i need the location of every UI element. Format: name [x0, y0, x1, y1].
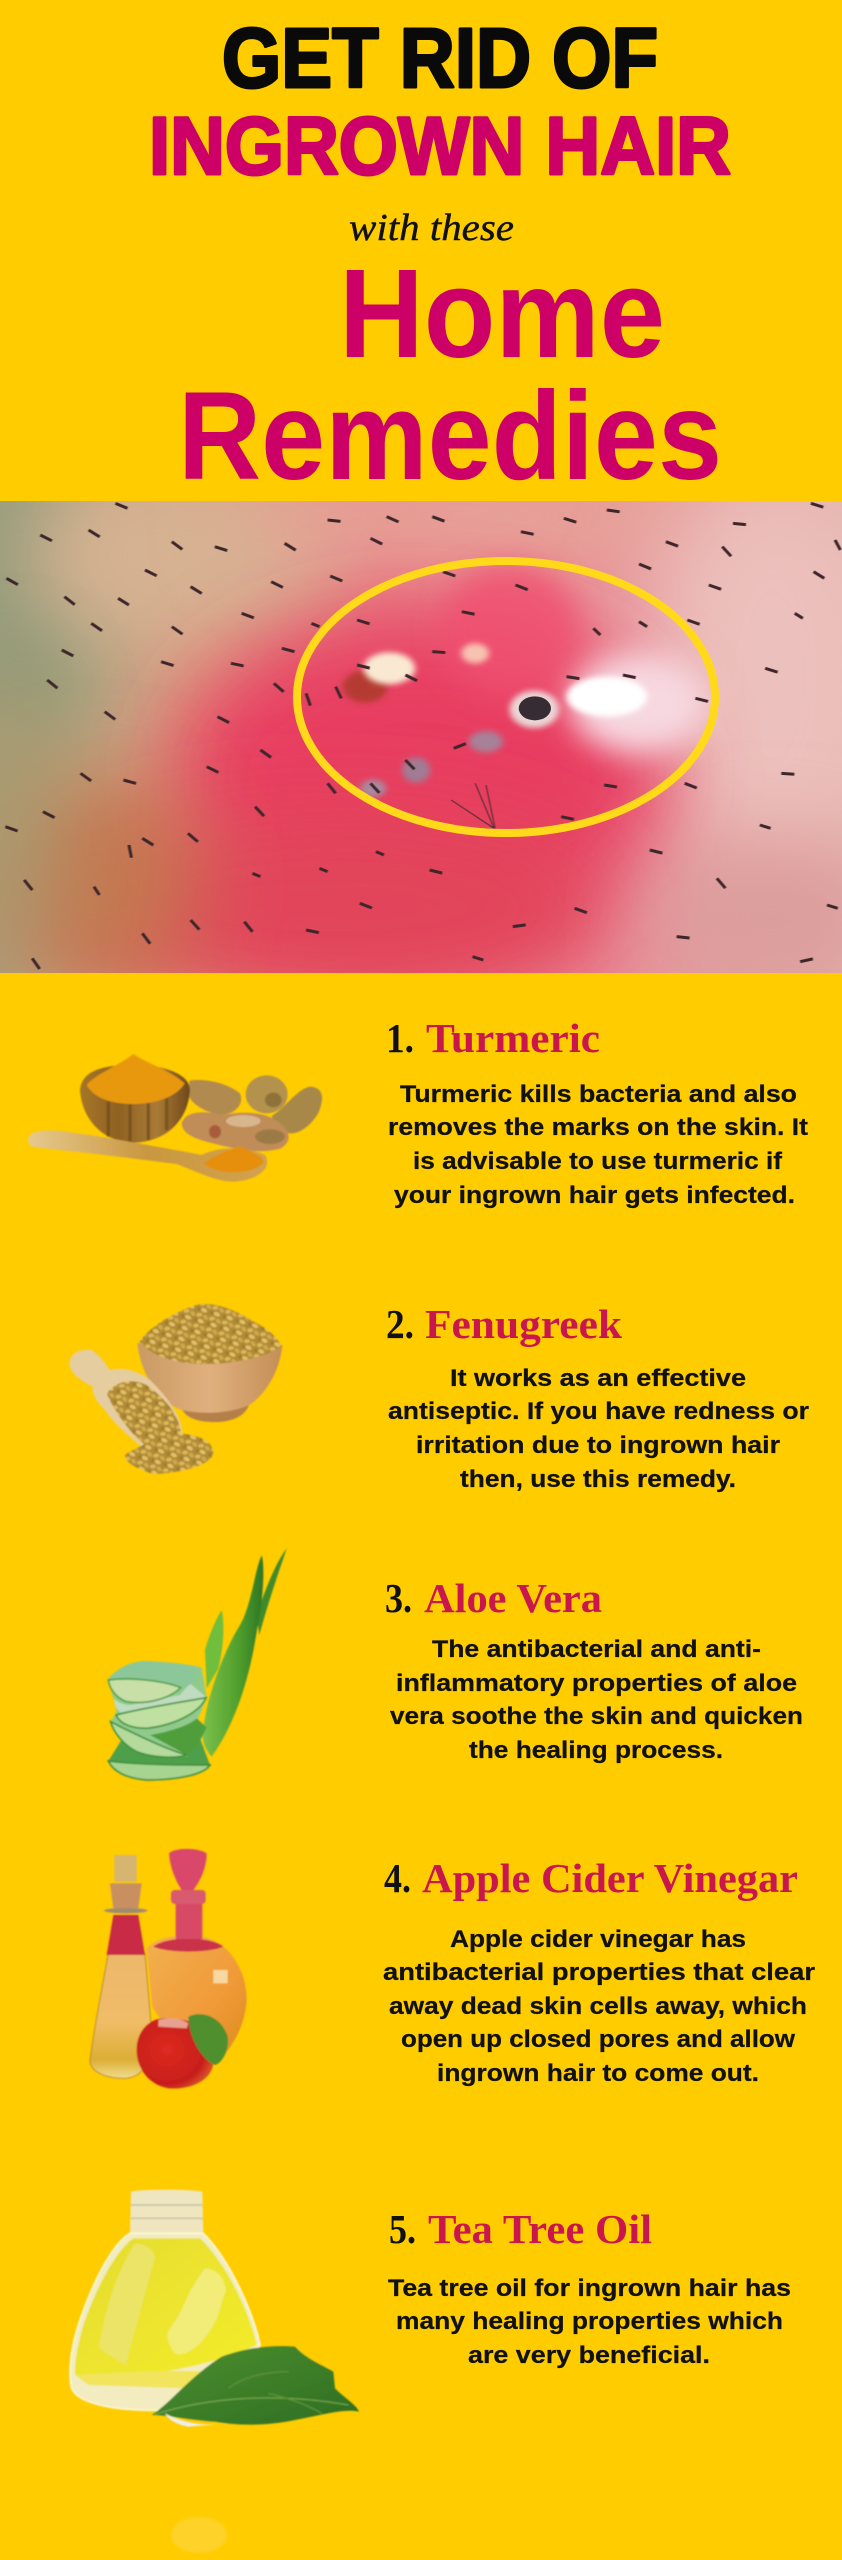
heading: 5. tea tree oil: Tea Tree Oil	[428, 2206, 652, 2252]
text block: apple cider vinegar description	[383, 1926, 815, 2087]
title line: home: Home	[339, 243, 665, 384]
photo: inflamed ingrown hair on skin	[0, 501, 842, 973]
heading: 1. turmeric: 1.	[386, 1015, 414, 1061]
remedy 4: apple cider vinegar	[90, 1849, 815, 2089]
title line: get rid of: GET RID OF	[222, 11, 658, 105]
text block: turmeric description: Turmeric kills bacteria and also	[400, 1081, 797, 1108]
yellow circle highlighting the ingrown hair	[297, 561, 715, 833]
text block: tea tree oil description: Tea tree oil for ingrown hair has	[388, 2275, 791, 2302]
heading: 4. apple cider vinegar: 4.	[384, 1855, 411, 1901]
text block: turmeric description: removes the marks on the skin. It	[388, 1114, 808, 1141]
text block: apple cider vinegar description: antibacterial properties that clear	[383, 1959, 815, 1986]
text block: aloe vera description: vera soothe the skin and quicken	[390, 1703, 803, 1730]
text block: turmeric description: is advisable to use turmeric if	[413, 1148, 783, 1175]
remedy 5: tea tree oil	[70, 2190, 791, 2427]
icon: oil bottle and leaf	[70, 2190, 359, 2427]
text block: apple cider vinegar description: away dead skin cells away, which	[389, 1993, 807, 2020]
remedy 3: aloe vera	[108, 1548, 803, 1780]
text block: aloe vera description	[390, 1636, 803, 1764]
text block: apple cider vinegar description: ingrown hair to come out.	[437, 2060, 759, 2087]
heading: 2. fenugreek: 2.	[386, 1301, 414, 1347]
icon: fenugreek bowl and scoop	[69, 1304, 282, 1474]
remedy 1: turmeric	[28, 1015, 808, 1209]
text block: fenugreek description: It works as an effective	[450, 1365, 746, 1392]
icon: turmeric bowl, root and spoon	[28, 1054, 322, 1182]
heading: 3. aloe vera: 3.	[385, 1575, 412, 1621]
heading: 4. apple cider vinegar: Apple Cider Vinegar	[422, 1855, 798, 1901]
title	[149, 11, 731, 506]
text block: fenugreek description: irritation due to ingrown hair	[416, 1432, 780, 1459]
text block: fenugreek description: then, use this remedy.	[460, 1466, 736, 1493]
title line: with these: with these	[349, 207, 514, 249]
text block: apple cider vinegar description: Apple cider vinegar has	[450, 1926, 746, 1953]
text block: tea tree oil description	[388, 2275, 791, 2369]
text block: turmeric description: your ingrown hair gets infected.	[394, 1182, 795, 1209]
text block: aloe vera description: the healing process.	[469, 1737, 723, 1764]
heading: 2. fenugreek: Fenugreek	[425, 1301, 622, 1347]
icon: aloe vera slices and leaves	[108, 1548, 287, 1780]
text block: aloe vera description: inflammatory properties of aloe	[396, 1670, 797, 1697]
text block: aloe vera description: The antibacterial and anti-	[432, 1636, 761, 1663]
heading: 1. turmeric: Turmeric	[426, 1015, 600, 1061]
text block: fenugreek description	[388, 1365, 809, 1493]
title line: ingrown hair: INGROWN HAIR	[149, 101, 731, 192]
heading: 3. aloe vera: Aloe Vera	[424, 1575, 602, 1621]
text block: turmeric description	[388, 1081, 808, 1209]
title line: remedies: Remedies	[178, 367, 722, 506]
text block: fenugreek description: antiseptic. If you have redness or	[388, 1398, 809, 1425]
text block: tea tree oil description: are very beneficial.	[468, 2342, 710, 2369]
text block: apple cider vinegar description: open up closed pores and allow	[401, 2026, 795, 2053]
faint watermark	[171, 2517, 227, 2553]
icon: vinegar bottles and apple	[90, 1849, 247, 2089]
text block: tea tree oil description: many healing properties which	[396, 2308, 783, 2335]
heading: 5. tea tree oil: 5.	[389, 2206, 416, 2252]
remedy 2: fenugreek	[69, 1301, 809, 1493]
